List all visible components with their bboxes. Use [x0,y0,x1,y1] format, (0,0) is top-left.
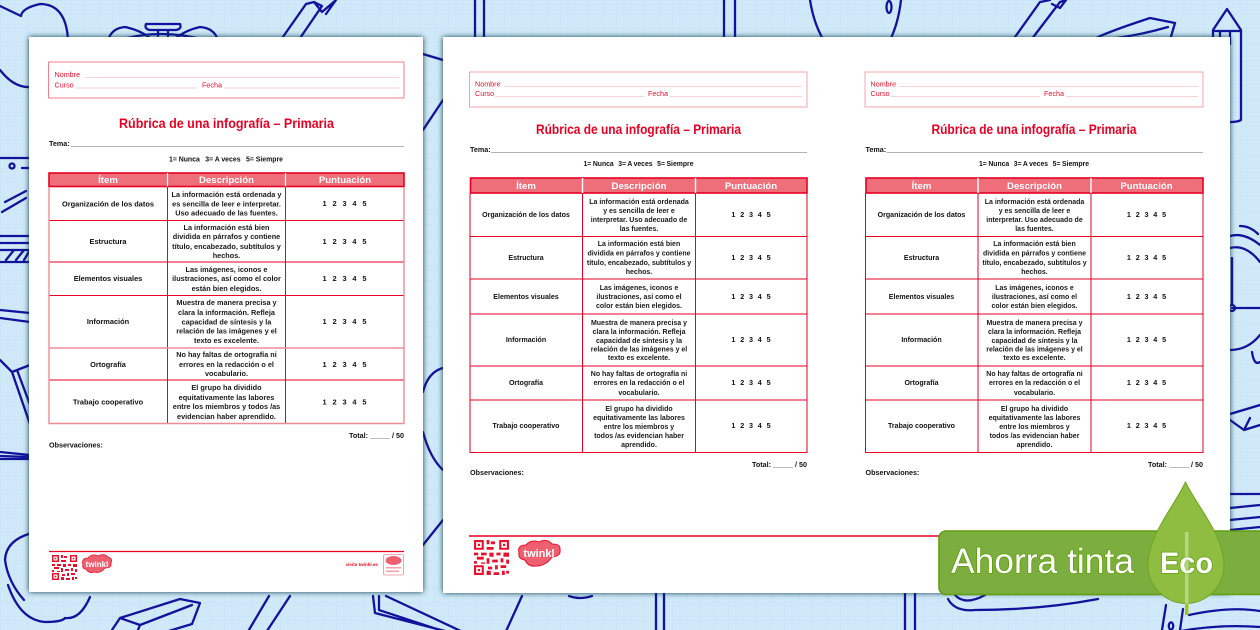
logo: twinkl: twinkl [86,560,108,569]
row: Información: clara la información. Refleja [593,329,686,336]
rating scale legend: 1= Nunca 3= A veces 5= Siempre [979,159,1089,168]
row: Organización de los datos: La información está ordenada y [172,190,282,199]
row: Estructura: La información está bien [993,241,1076,248]
total score: Total: _____ / 50 [1148,460,1203,469]
row: Ortografía: errores en la redacción o el [179,360,274,369]
row: Trabajo cooperativo: 1 2 3 4 5 [731,421,771,430]
table header: Descripción [612,181,667,192]
name and class box [865,72,1203,107]
row: Organización de los datos [482,199,771,233]
table header: Puntuación [319,175,371,186]
name and class box: Curso [870,89,890,98]
row: Trabajo cooperativo: 1 2 3 4 5 [322,398,366,406]
row: Estructura: dividida en párrafos y contiene [173,232,280,241]
name and class box: Curso [475,89,494,98]
row: Ortografía [904,371,1166,397]
row: Ortografía: 1 2 3 4 5 [731,378,771,387]
row: Ortografía: vocabulario. [1014,390,1055,397]
row: Información: capacidad de síntesis y la [596,338,682,345]
row: Estructura: La información está bien [184,223,269,232]
row: Elementos visuales [74,265,366,293]
row: Ortografía: Ortografía [904,380,939,387]
observations label: Observaciones: [470,468,524,477]
row: Trabajo cooperativo: El grupo ha dividido [605,406,673,413]
footer of page two [469,536,945,575]
row: Trabajo cooperativo: Trabajo cooperativo [493,423,560,430]
sheet: left rubric [470,72,807,477]
footer [49,552,404,580]
row: Estructura: Estructura [508,255,544,262]
row: Ortografía: No hay faltas de ortografía ni [176,350,277,359]
row: Trabajo cooperativo: entre los miembros y todos /as [173,402,280,411]
row: Estructura: Estructura [904,255,939,262]
row: Trabajo cooperativo: Trabajo cooperativo [73,398,144,406]
row: Estructura: dividida en párrafos y contiene [983,250,1086,258]
name and class box: Fecha [1044,89,1064,98]
row: Organización de los datos: La información está ordenada [589,199,689,206]
website link: visita twinkl.es [346,562,378,567]
banner label: Ahorra tinta [951,542,1135,581]
row: Trabajo cooperativo: El grupo ha dividido [191,383,262,392]
rating scale legend: 1= Nunca 3= A veces 5= Siempre [169,154,283,164]
table header: Puntuación [725,181,777,192]
row: Organización de los datos: las fuentes. [1015,226,1054,233]
name and class box [470,72,807,107]
row: Elementos visuales: Las imágenes, iconos e [995,285,1074,292]
row: Información: 1 2 3 4 5 [1127,335,1166,344]
title: Rúbrica de una infografía – Primaria [536,122,741,137]
name and class box [48,62,404,98]
row: Trabajo cooperativo: equitativamente las labores [593,415,685,422]
row: Trabajo cooperativo [888,406,1166,449]
total score: Total: _____ / 50 [752,460,807,469]
total score: Total: _____ / 50 [349,431,404,440]
row: Información: relación de las imágenes y el [591,346,687,354]
drop highlight stem [1185,532,1188,604]
row: Ortografía: errores en la redacción o el [593,380,685,387]
row: Estructura [90,223,366,260]
row: Trabajo cooperativo [73,383,366,421]
row: Trabajo cooperativo: 1 2 3 4 5 [1127,421,1166,430]
callout: eco ink saving banner [939,482,1260,615]
row: Elementos visuales: ilustraciones, así como el color [172,274,281,283]
row: Trabajo cooperativo: equitativamente las labores [179,393,274,402]
row: Estructura: título, encabezado, subtítulos y [172,242,282,251]
row: Estructura: hechos. [626,269,652,276]
row: Información: texto es excelente. [194,336,259,345]
row: Trabajo cooperativo: Trabajo cooperativo [888,423,956,430]
row: Estructura: La información está bien [598,241,680,248]
row: Elementos visuales: están bien elegidos. [192,284,261,293]
row: Organización de los datos: Organización de los datos [482,212,570,219]
row: Elementos visuales: Elementos visuales [889,294,954,301]
table header [866,178,1203,193]
row: Ortografía: 1 2 3 4 5 [1127,378,1166,387]
row: Información: Muestra de manera precisa y [591,320,687,327]
row: Estructura [508,241,771,276]
row: Elementos visuales: color están bien elegidos. [596,303,682,310]
row: Estructura [904,241,1166,276]
row: Organización de los datos: 1 2 3 4 5 [731,210,771,219]
row: Información [506,320,771,362]
row: Organización de los datos: 1 2 3 4 5 [322,199,366,208]
row: Información: clara la información. Refleja [178,308,276,317]
rubric table [470,178,807,452]
row: Elementos visuales: Las imágenes, iconos e [186,265,267,274]
row: Información: Muestra de manera precisa y [986,320,1083,327]
row: Elementos visuales [493,285,771,310]
row: Ortografía: errores en la redacción o el [989,380,1080,387]
logo: twinkl [83,555,112,573]
row: Ortografía: 1 2 3 4 5 [322,360,366,369]
icon: green ink drop [1148,482,1224,615]
icon: QR code [474,540,509,575]
name and class box: Fecha [202,80,222,90]
row: Elementos visuales [889,285,1166,310]
row: Organización de los datos: Uso adecuado de las fuentes. [175,208,278,218]
logo: twinkl [519,540,560,566]
row: Información: Información [901,337,942,344]
row: Estructura: dividida en párrafos y contiene [587,250,691,258]
row: Organización de los datos: La información está ordenada [985,199,1084,206]
row: Estructura: 1 2 3 4 5 [322,237,366,246]
row: Trabajo cooperativo: todos /as evidencian haber [594,433,684,440]
row: Estructura: hechos. [213,251,240,260]
row: Información [87,298,366,345]
row: Elementos visuales: Elementos visuales [74,274,142,283]
row: Elementos visuales: color están bien elegidos. [992,303,1078,310]
logo: twinkl: twinkl [523,548,555,560]
row: Organización de los datos: interpretar. Uso adecuado de [986,217,1083,224]
panel: page two, double sheet [443,37,1230,593]
row: Organización de los datos: y es sencilla de leer e [603,208,675,215]
table header [470,178,807,193]
row: Ortografía [509,371,771,397]
row: Organización de los datos: y es sencilla de leer e [999,208,1070,215]
row: Información: relación de las imágenes y el [176,326,277,336]
sheet: right rubric [865,72,1203,477]
row: Información: capacidad de síntesis y la [182,318,272,326]
title: Rúbrica de una infografía – Primaria [119,116,334,131]
row: Información: Información [506,337,546,344]
row: Información: 1 2 3 4 5 [731,335,771,344]
row: Elementos visuales: 1 2 3 4 5 [1127,292,1166,301]
row: Organización de los datos [62,190,366,218]
topic line: Tema: [866,145,886,154]
row: Información: clara la información. Refleja [988,329,1081,336]
row: Organización de los datos [878,199,1166,233]
row: Organización de los datos: Organización de los datos [62,200,154,208]
table header: Descripción [1007,181,1062,192]
name and class box: Nombre [475,80,501,88]
row: Ortografía: No hay faltas de ortografía ni [591,371,687,378]
row: Trabajo cooperativo: equitativamente las labores [989,415,1081,422]
row: Información: texto es excelente. [1003,355,1066,362]
row: Estructura: título, encabezado, subtítulos y [587,260,691,267]
row: Elementos visuales: ilustraciones, así como el [596,294,682,301]
table header: Ítem [912,180,931,192]
name and class box: Fecha [648,89,668,98]
row: Información: relación de las imágenes y el [986,346,1083,354]
panel: page one, single rubric sheet [29,37,423,592]
row: Ortografía: No hay faltas de ortografía ni [986,371,1083,378]
title: Rúbrica de una infografía – Primaria [932,122,1137,137]
row: Ortografía: Ortografía [509,380,543,387]
eco label: Eco [1160,547,1213,580]
row: Información: Muestra de manera precisa y [176,298,278,307]
table header: Ítem [516,180,536,192]
topic line: Tema: [49,139,70,148]
table header: Puntuación [1120,181,1173,192]
row: Información: capacidad de síntesis y la [992,338,1078,345]
row: Estructura: 1 2 3 4 5 [1127,253,1166,262]
row: Trabajo cooperativo: todos /as evidencian haber [990,433,1080,440]
row: Ortografía: Ortografía [90,360,127,369]
row: Trabajo cooperativo: El grupo ha dividido [1001,406,1068,413]
row: Estructura: hechos. [1021,269,1048,276]
table header [49,173,404,186]
name and class box: Nombre [870,80,896,88]
row: Estructura: 1 2 3 4 5 [731,253,771,262]
row: Estructura: título, encabezado, subtítulos y [982,260,1087,267]
icon: QR code [52,555,77,580]
observations label: Observaciones: [49,440,103,450]
row: Trabajo cooperativo: aprendido. [621,442,657,449]
row: Trabajo cooperativo: aprendido. [1017,442,1052,449]
name and class box: Nombre [54,70,80,79]
row: Trabajo cooperativo: entre los miembros y [604,424,674,431]
rubric table [49,173,404,424]
row: Elementos visuales: 1 2 3 4 5 [322,274,366,283]
row: Elementos visuales: 1 2 3 4 5 [731,292,771,301]
rating scale legend: 1= Nunca 3= A veces 5= Siempre [584,159,694,168]
row: Trabajo cooperativo [493,406,771,449]
row: Organización de los datos: 1 2 3 4 5 [1127,210,1166,219]
row: Información: 1 2 3 4 5 [322,317,366,326]
row: Ortografía: vocabulario. [205,369,248,378]
row: Organización de los datos: es sencilla de leer e interpretar. [172,200,281,208]
row: Elementos visuales: Elementos visuales [493,294,559,301]
rubric table [866,178,1203,452]
row: Información: Información [87,317,130,326]
row: Elementos visuales: Las imágenes, iconos e [600,285,678,292]
row: Organización de los datos: las fuentes. [620,226,658,233]
name and class box: Curso [54,80,74,90]
row: Ortografía: vocabulario. [618,390,660,397]
row: Trabajo cooperativo: entre los miembros y [999,424,1070,431]
table header: Descripción [199,175,254,186]
topic line: Tema: [470,145,491,154]
badge [384,554,404,575]
observations label: Observaciones: [866,468,919,477]
row: Elementos visuales: ilustraciones, así como el [992,294,1077,301]
row: Información [901,320,1166,362]
row: Información: texto es excelente. [608,355,670,362]
row: Ortografía [90,350,366,378]
row: Trabajo cooperativo: evidencian haber aprendido. [177,412,276,421]
table header: Ítem [98,174,118,186]
row: Organización de los datos: interpretar. Uso adecuado de [591,217,687,224]
row: Organización de los datos: Organización de los datos [878,212,965,219]
row: Estructura: Estructura [90,237,127,246]
